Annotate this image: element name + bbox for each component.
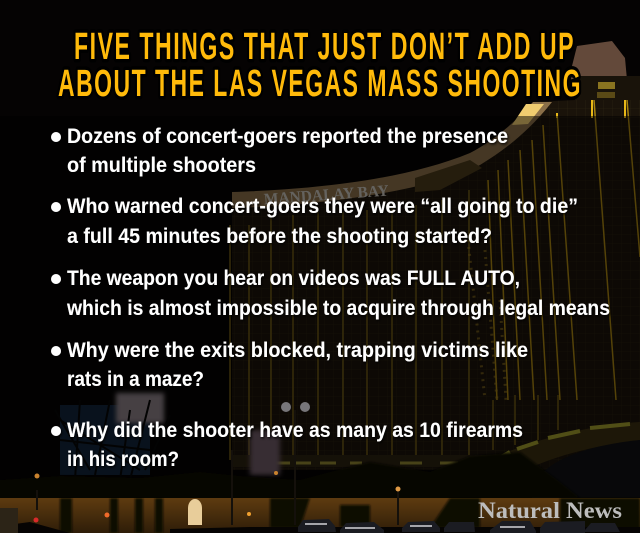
hotel crown band with sign — [232, 102, 552, 208]
bullet list — [51, 125, 610, 471]
bullet 2: warning: Who warned concert-goers they were “all going to die” — [67, 195, 578, 218]
hotel main building — [232, 100, 640, 470]
bullet 5: firearms: in his room? — [67, 448, 179, 471]
parked cars — [298, 519, 620, 533]
bright line tops above the overlay — [557, 100, 625, 118]
bullet 1: multiple shooters — [51, 125, 508, 177]
hotel crown band with sign: MANDALAY BAY — [263, 183, 390, 208]
logo: Natural News: Natural News — [478, 498, 622, 523]
bullet 2: warning — [51, 195, 578, 248]
bullet 5: firearms: Why did the shooter have as many as 10 firearms — [67, 419, 523, 442]
hotel gold vertical lines — [230, 100, 640, 460]
billboard with trees — [55, 393, 280, 480]
bullet 2: warning: a full 45 minutes before the shooting started? — [67, 225, 492, 248]
hotel tower top — [571, 41, 640, 120]
bottom street band — [0, 498, 640, 533]
bullet 3: full auto: which is almost impossible to acquire through legal means — [66, 297, 610, 320]
bullet 1: multiple shooters: of multiple shooters — [67, 154, 256, 177]
tree silhouettes — [0, 452, 580, 498]
bullet 3: full auto — [51, 267, 610, 320]
title — [58, 26, 582, 105]
bullet 3: full auto: The weapon you hear on videos was FULL AUTO, — [67, 267, 520, 290]
bullet 1: multiple shooters: Dozens of concert-goers reported the presence — [67, 125, 508, 148]
street lamps — [34, 402, 400, 525]
dark overlay panel — [0, 116, 640, 498]
bullet 4: exits blocked: rats in a maze? — [67, 368, 204, 391]
hotel podium — [232, 422, 640, 500]
bullet 4: exits blocked — [51, 339, 528, 391]
bullet 5: firearms — [51, 419, 523, 471]
bullet 4: exits blocked: Why were the exits blocked, trapping victims like — [67, 339, 528, 362]
